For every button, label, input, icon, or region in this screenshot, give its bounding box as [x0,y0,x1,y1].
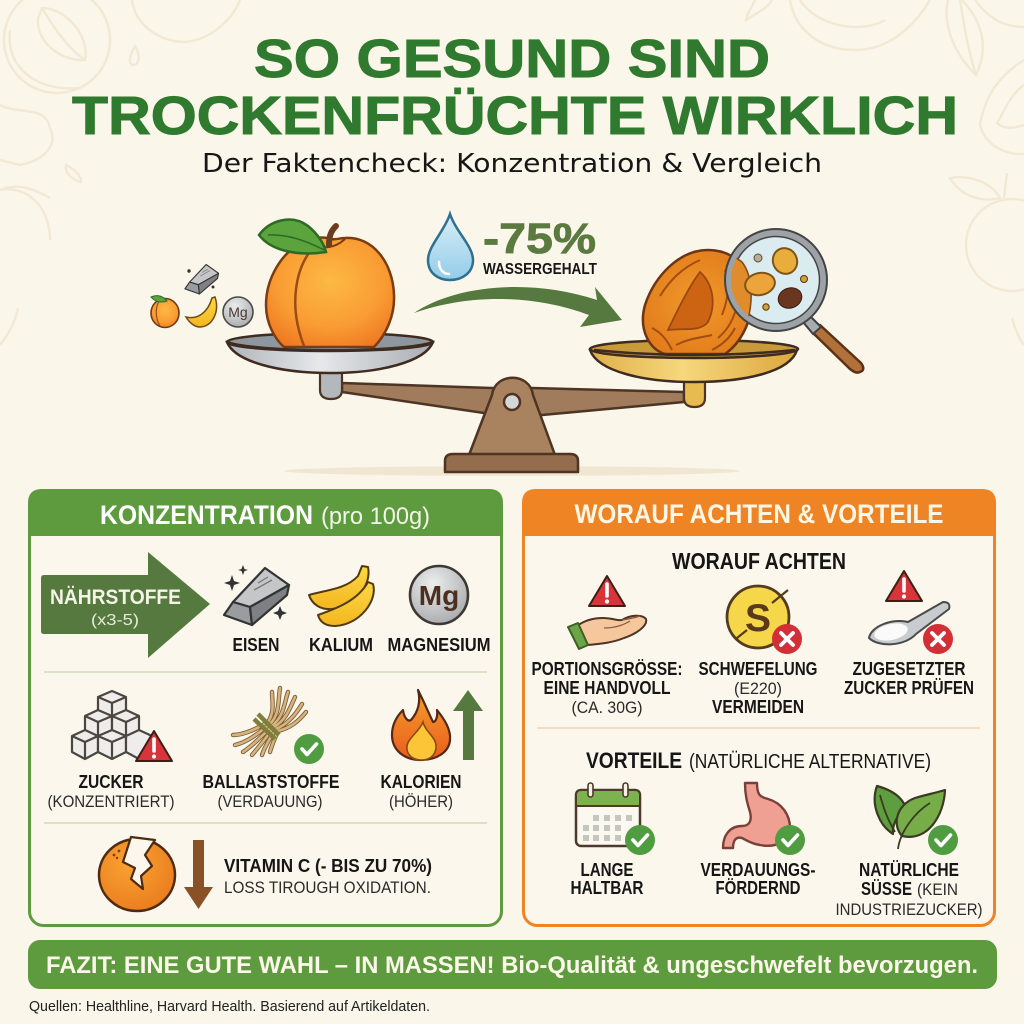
item: Verdauungsfördernd [700,783,816,898]
item: Portionsgrösse: (CA. 30G) [572,698,642,717]
item: Kalium: KALIUM [309,635,373,655]
item: Schwefelung: (E220) [734,679,782,698]
scale stand [469,378,555,455]
item: Zucker: (KONZENTRIERT) [48,792,174,811]
item: Portionsgrösse [532,576,682,717]
left pan post [320,372,342,399]
item: Natürliche Süsse [836,786,982,919]
item: Eisen: EISEN [232,635,280,655]
item: Vitamin C: LOSS TIROUGH OXIDATION. [224,878,431,897]
stem [329,226,336,245]
left pan [227,342,433,373]
panel header [522,489,996,536]
icon: water drop [428,214,473,280]
conclusion bar: FAZIT: EINE GUTE WAHL – IN MASSEN! Bio-Qualität & ungeschwefelt bevorzugen. [46,952,978,979]
title [72,29,958,146]
panel heading: WORAUF ACHTEN & VORTEILE [574,499,944,529]
decorative fruit outlines [0,0,1024,345]
item: Portionsgrösse: EINE HANDVOLL [544,678,670,698]
water loss label: -75% [483,215,596,263]
item: Schwefelung: S [745,597,771,640]
panel: Worauf achten & Vorteile [522,489,996,926]
panel header [28,489,503,536]
water loss label [483,215,597,278]
icon: magnifying glass [725,229,863,373]
item: Natürliche Süsse: SÜSSE [861,879,912,899]
title: TROCKENFRÜCHTE WIRKLICH [72,86,958,146]
arrow: Nährstoffe x3-5: (x3-5) [91,612,139,629]
item: Ballaststoffe: BALLASTSTOFFE [202,772,340,792]
scale beam [342,383,684,415]
item: Natürliche Süsse: NATÜRLICHE [859,860,959,880]
ground shadow [284,466,740,476]
arrow: Nährstoffe x3-5 [41,552,210,658]
item: Natürliche Süsse: INDUSTRIEZUCKER) [836,900,982,919]
item: Kalium [309,566,374,655]
item: Lange haltbar: LANGE [580,860,634,880]
item: Schwefelung [698,586,818,717]
subheading: Vorteile: VORTEILE [586,748,682,773]
item: Magnesium [388,566,490,655]
subheading: Vorteile [586,748,931,773]
water loss label: WASSERGEHALT [483,261,597,278]
right pan post [684,380,705,407]
icon: dried apricot [594,250,795,355]
mini icons: nutrients [151,265,253,328]
icon: cracked orange [99,837,175,911]
item: Vitamin C: VITAMIN C (- BIS ZU 70%) [224,855,432,876]
right scale pan [590,340,798,382]
item: Ballaststoffe [202,688,340,811]
item: Zucker prüfen [844,571,974,698]
panel: Konzentration [28,489,503,926]
item: Lange haltbar: HALTBAR [570,878,644,898]
scale illustration [227,333,740,476]
panel heading: (pro 100g) [321,503,430,530]
arrow: Nährstoffe x3-5: NÄHRSTOFFE [50,586,181,609]
item: Verdauungsfördernd: VERDAUUNGS- [700,860,816,880]
item: Vitamin C [99,837,432,911]
item: Zucker prüfen: ZUGESETZTER [852,659,966,679]
conclusion bar [28,940,997,989]
item: Schwefelung: VERMEIDEN [712,697,804,717]
item: Portionsgrösse: PORTIONSGRÖSSE: [532,659,682,679]
mini icons: nutrients: Mg [228,304,248,320]
subheading: Worauf achten: WORAUF ACHTEN [672,548,846,574]
panel heading: KONZENTRATION [100,500,313,530]
item: Natürliche Süsse: (KEIN [917,880,958,899]
subheading: Vorteile: (NATÜRLICHE ALTERNATIVE) [689,750,931,773]
item: Zucker prüfen: ZUCKER PRÜFEN [844,678,974,698]
item: Zucker [48,691,174,811]
item: Verdauungsfördernd: FÖRDERND [716,878,800,898]
item: Kalorien: KALORIEN [380,772,462,792]
title: SO GESUND SIND [254,29,770,89]
item: Magnesium: Mg [419,580,459,611]
item: Kalorien: (HÖHER) [389,792,453,811]
sources: Quellen: Healthline, Harvard Health. Basierend auf Artikeldaten. [29,998,430,1015]
item: Lange haltbar [570,783,655,898]
subtitle: Der Faktencheck: Konzentration & Vergleich [202,149,822,179]
item: Magnesium: MAGNESIUM [388,635,490,655]
leaf [259,220,326,253]
arrow: fresh to dried [414,287,622,327]
item: Eisen [224,565,289,655]
item: Zucker: ZUCKER [78,772,144,792]
icon: fresh peach [227,220,433,350]
item: Ballaststoffe: (VERDAUUNG) [218,792,322,811]
item: Kalorien [380,690,483,811]
front lip of left pan [227,342,433,350]
item: Schwefelung: SCHWEFELUNG [698,659,818,679]
